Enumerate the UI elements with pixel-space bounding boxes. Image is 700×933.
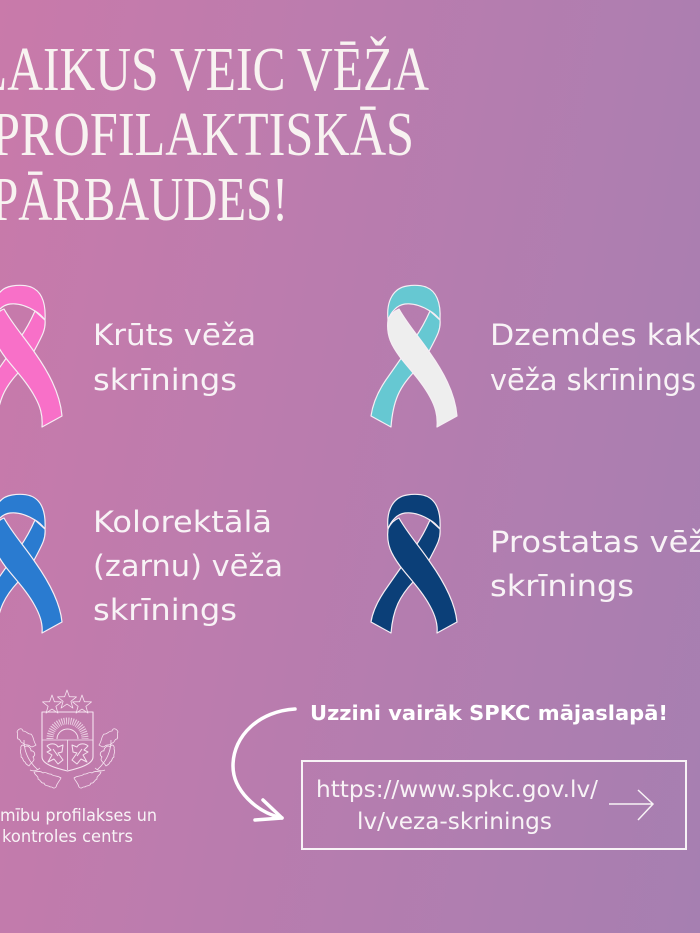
icon: pink ribbon (0, 285, 62, 427)
title: PROFILAKTISKĀS (0, 101, 414, 169)
text: cervical cancer screening (490, 318, 700, 397)
text: prostate cancer screening (490, 525, 700, 603)
text: colorectal cancer screening (93, 505, 283, 627)
text: prostate cancer screening: Prostatas vēža (490, 525, 700, 559)
link text: https://www.spkc.gov.lv/ (316, 775, 598, 803)
text: cervical cancer screening: vēža skrīnings (490, 363, 696, 397)
text: prostate cancer screening: skrīnings (490, 569, 634, 603)
icon: blue ribbon (0, 494, 62, 633)
call to action: Uzzini vairāk SPKC mājaslapā! (310, 701, 668, 725)
text: colorectal cancer screening: Kolorektālā (93, 505, 272, 539)
icon: coat of arms (17, 690, 118, 788)
text: organisation name: kontroles centrs (2, 827, 133, 846)
link text: lv/veza-skrinings (357, 807, 552, 835)
icon: teal and white ribbon (371, 285, 457, 427)
text: breast cancer screening (93, 318, 256, 397)
icon: navy ribbon (371, 494, 457, 633)
title (0, 36, 429, 234)
text: organisation name (0, 806, 157, 846)
link text (316, 775, 598, 835)
title: PĀRBAUDES! (0, 166, 288, 234)
text: colorectal cancer screening: skrīnings (93, 593, 237, 627)
text: breast cancer screening: skrīnings (93, 363, 237, 397)
text: colorectal cancer screening: (zarnu) vēža (93, 549, 283, 583)
link box (302, 761, 686, 849)
right arrow (609, 790, 653, 820)
text: breast cancer screening: Krūts vēža (93, 318, 256, 352)
curved arrow (233, 709, 295, 820)
